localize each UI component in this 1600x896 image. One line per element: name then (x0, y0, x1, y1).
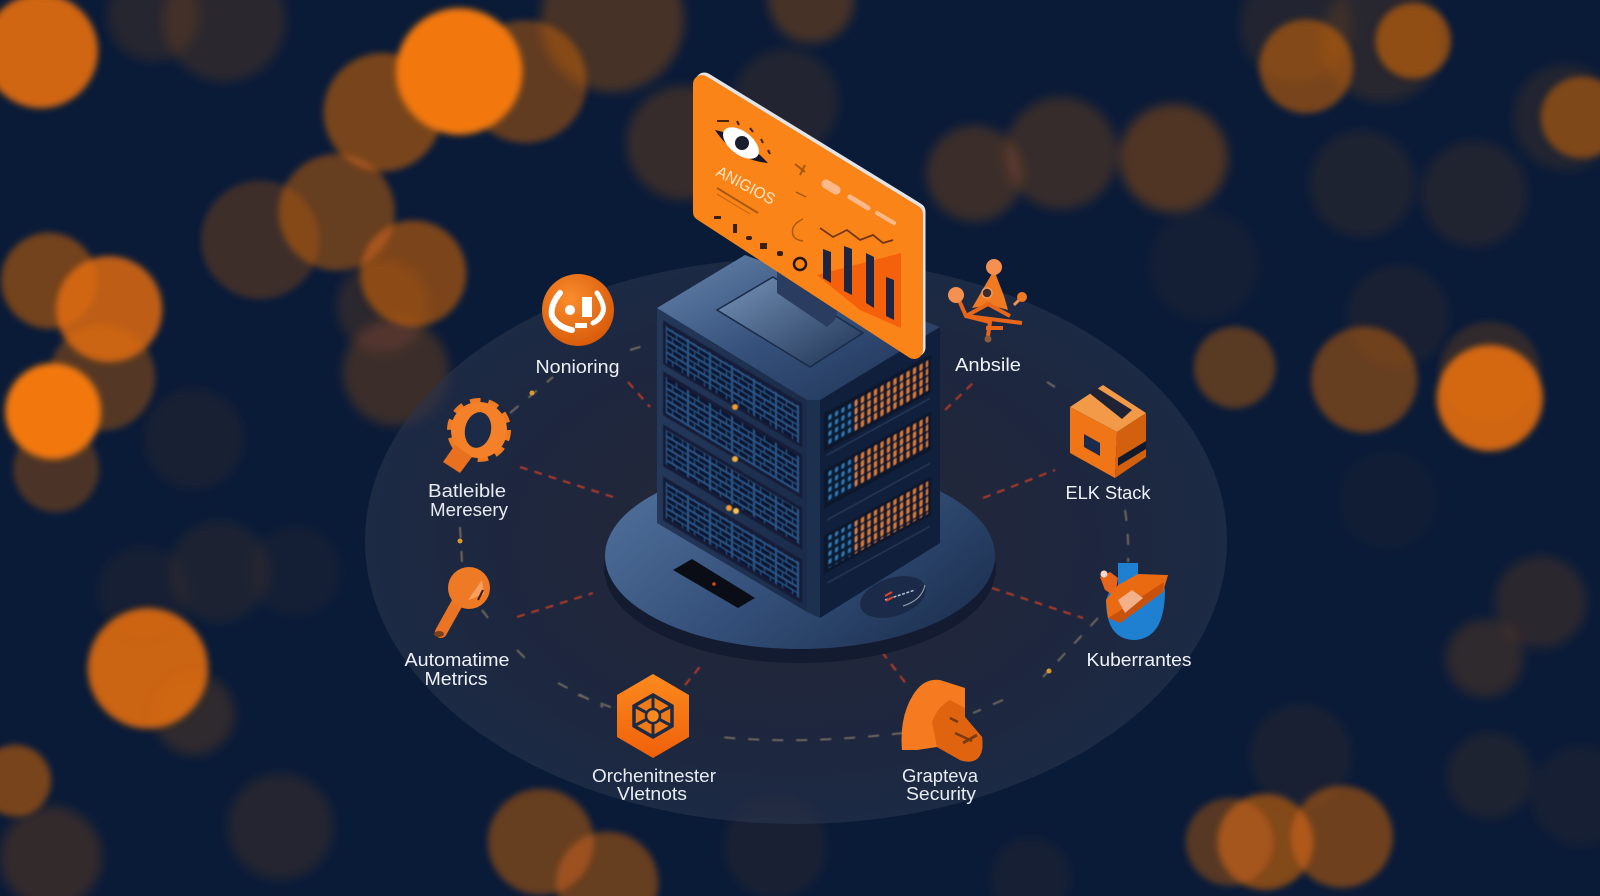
icon: wrench (434, 567, 490, 637)
brand underline (717, 188, 758, 214)
node: Grapteva Security (902, 680, 982, 804)
panel glyphs (792, 164, 806, 241)
label: Nonioring (536, 357, 620, 377)
server right face (820, 327, 940, 618)
orbit dots (458, 390, 1052, 674)
server base disc (604, 463, 996, 663)
panel brand: ANIGIOS (713, 164, 778, 209)
node: Orchenitnester Vletnots (592, 674, 716, 804)
label: Grapteva: Grapteva (902, 766, 979, 786)
node: Monitoring (536, 274, 620, 377)
chart line (820, 228, 893, 243)
pale pills (826, 184, 894, 223)
server tower (657, 255, 940, 618)
disc slot (673, 559, 755, 608)
icon: gear (443, 402, 507, 473)
top inset tray (717, 277, 863, 367)
label: Metrics: Metrics (424, 669, 488, 689)
label: Anbsile (955, 355, 1021, 375)
icon: box (1070, 385, 1146, 478)
disc badge (855, 568, 931, 626)
node: ELK Stack (1066, 385, 1152, 503)
status lights (726, 404, 739, 514)
label: Meresery: Meresery (430, 500, 508, 520)
panel face (702, 84, 914, 350)
small icons row (714, 216, 806, 270)
label: ELK Stack (1066, 483, 1152, 503)
server left face (657, 308, 807, 612)
dashed red connectors (517, 382, 1083, 685)
label: Orchenitnester: Orchenitnester (592, 766, 716, 786)
node: Automatime Metrics (404, 567, 510, 689)
orange dashboard panel (702, 82, 916, 350)
label: Security: Security (906, 784, 976, 804)
server corner (807, 400, 820, 618)
chart bars (823, 246, 894, 320)
label: Kuberrantes (1086, 650, 1192, 670)
node: Anbsile (948, 259, 1027, 375)
label: Vletnots: Vletnots (617, 784, 687, 804)
icon: monitoring gauge (542, 274, 614, 346)
label: Automatime: Automatime (404, 650, 510, 670)
icon: kubernetes heart (1100, 563, 1168, 640)
left rack units (663, 320, 802, 604)
monitor stand (777, 270, 840, 327)
chart area (817, 253, 901, 328)
server top face (657, 255, 940, 400)
icon: ansible network (948, 259, 1027, 342)
icon: helmet (902, 680, 982, 762)
circular platform halo (365, 258, 1227, 824)
label: Batleible: Batleible (428, 481, 506, 501)
eye logo (715, 121, 770, 165)
panel edge (704, 82, 916, 348)
node: Batleible Meresery (428, 402, 508, 520)
icon: hexagon wheel (617, 674, 689, 758)
node: Kuberrantes (1086, 563, 1192, 670)
right rack LEDs (824, 355, 931, 585)
grey orbit connectors (460, 346, 1128, 740)
